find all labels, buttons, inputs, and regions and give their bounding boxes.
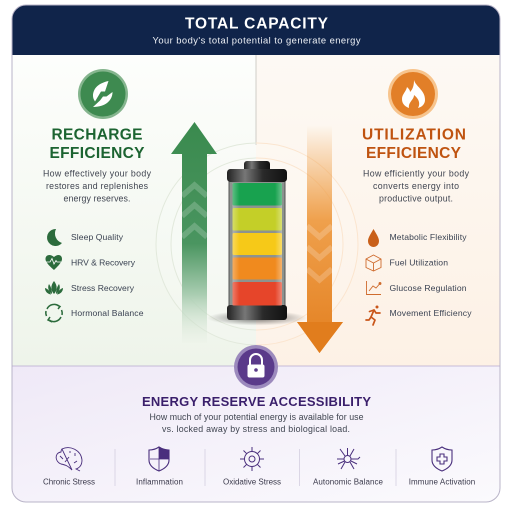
arrow: orange downward xyxy=(297,125,343,353)
heading: utilization efficiency: UTILIZATION xyxy=(362,126,466,144)
icon: half shield xyxy=(149,447,169,471)
battery cells xyxy=(232,183,282,306)
panel: energy reserve background xyxy=(12,366,500,502)
label: sleep quality: Sleep Quality xyxy=(71,232,124,242)
label: stress recovery: Stress Recovery xyxy=(71,283,135,293)
text: reserve description: vs. locked away by stress and biological load. xyxy=(162,424,350,434)
panel: utilization background xyxy=(256,55,500,366)
label: Inflammation xyxy=(136,478,183,486)
icon: moon xyxy=(47,229,62,246)
label: metabolic flexibility: Metabolic Flexibility xyxy=(390,232,467,242)
label: hormonal balance: Hormonal Balance xyxy=(71,308,144,318)
dividers xyxy=(115,449,396,486)
text: utilization description: productive output. xyxy=(379,194,453,204)
text: utilization description: How efficiently your body xyxy=(363,168,470,178)
text: recharge description xyxy=(43,168,152,204)
subtitle: Your body's total potential to generate energy xyxy=(152,34,361,46)
item: oxidative stress xyxy=(223,447,281,486)
text: reserve description xyxy=(150,412,364,434)
heading: recharge efficiency xyxy=(50,126,145,162)
battery body xyxy=(229,178,285,310)
text: utilization description xyxy=(363,168,470,204)
text: recharge description: How effectively your body xyxy=(43,168,152,178)
label: fuel utilization: Fuel Utilization xyxy=(390,258,448,268)
battery xyxy=(207,161,307,326)
heading: recharge efficiency: EFFICIENCY xyxy=(50,145,145,162)
text: recharge description: restores and replenishes xyxy=(46,181,149,191)
decorative rings xyxy=(156,143,358,345)
header band xyxy=(12,5,500,55)
text: recharge description: energy reserves. xyxy=(64,194,130,204)
icon: lock badge xyxy=(234,345,278,389)
item: autonomic balance xyxy=(313,448,384,486)
label: movement efficiency: Movement Efficiency xyxy=(390,308,472,318)
heading: energy reserve accessibility: ENERGY RESERVE ACCESSIBILITY xyxy=(142,394,371,409)
list: recharge factors xyxy=(45,229,144,322)
title: TOTAL CAPACITY xyxy=(185,16,329,32)
battery base xyxy=(227,305,287,320)
bottom panel top rule xyxy=(12,365,500,367)
label: Immune Activation xyxy=(409,478,475,486)
arrow: green upward xyxy=(171,122,217,343)
heading: recharge efficiency: RECHARGE xyxy=(52,126,142,144)
icon: oxidative burst xyxy=(240,447,264,471)
label: Autonomic Balance xyxy=(313,478,384,486)
icon: heart xyxy=(46,255,62,270)
icon: drop xyxy=(368,229,379,247)
label: glucose regulation: Glucose Regulation xyxy=(390,283,467,293)
icon: cycle xyxy=(46,304,62,322)
item: chronic stress xyxy=(43,448,95,486)
icon: runner xyxy=(366,306,380,325)
item: inflammation xyxy=(136,447,183,486)
icon: shield plus xyxy=(432,447,452,471)
list: utilization factors xyxy=(366,229,472,325)
heading: utilization efficiency: EFFICIENCY xyxy=(366,145,462,162)
icon: chart xyxy=(366,281,381,294)
heading: utilization efficiency xyxy=(362,126,466,162)
label: Oxidative Stress xyxy=(223,478,281,486)
text: utilization description: converts energy into xyxy=(373,181,459,191)
panel divider xyxy=(255,55,257,145)
text: reserve description: How much of your potential energy is available for use xyxy=(150,412,364,422)
icon: cube xyxy=(366,255,381,271)
icon: utilization flame badge xyxy=(388,69,438,119)
icon: lotus xyxy=(45,281,63,294)
icon: brain xyxy=(56,448,82,471)
icon: recharge lightning badge xyxy=(78,69,128,119)
icon: neuron xyxy=(337,448,360,469)
label: Chronic Stress xyxy=(43,478,95,486)
item: immune activation xyxy=(409,447,475,486)
label: hrv recovery: HRV & Recovery xyxy=(71,258,136,268)
panel: recharge background xyxy=(12,142,256,366)
battery highlight xyxy=(232,183,282,306)
battery cap xyxy=(244,161,270,172)
